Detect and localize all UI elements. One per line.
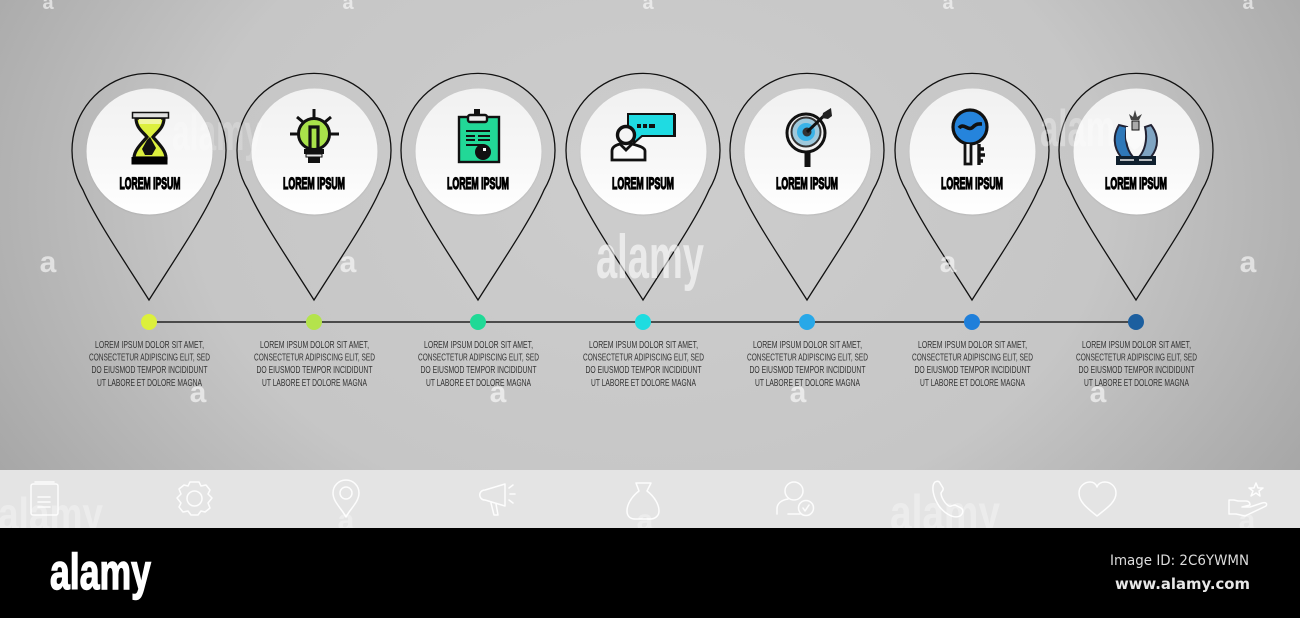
watermarks over artwork: a [190,376,207,409]
description [89,339,210,389]
step 6: key pin [895,73,1049,389]
description: UT LABORE ET DOLORE MAGNA [1084,377,1189,389]
description: CONSECTETUR ADIPISCING ELIT, SED [418,352,539,364]
description: LOREM IPSUM DOLOR SIT AMET, [753,339,862,351]
description [254,339,375,389]
footer bar [0,528,1300,618]
icon: person with speech bubble [612,114,676,160]
strip watermarks: a [338,504,355,537]
description: LOREM IPSUM DOLOR SIT AMET, [589,339,698,351]
pin outline [566,73,720,300]
pin outline [1059,73,1213,300]
white disc [86,88,212,214]
label: LOREM IPSUM [120,174,180,193]
icon: heart outline [1079,482,1116,516]
watermarks over artwork: a [940,246,957,279]
watermarks over artwork: a [40,246,57,279]
website: www.alamy.com [1115,575,1250,593]
pin outline [895,73,1049,300]
strip watermarks: a [1239,504,1256,537]
strip watermarks [0,485,1256,541]
description: LOREM IPSUM DOLOR SIT AMET, [1082,339,1191,351]
description [747,339,868,389]
watermarks over artwork: a [1090,376,1107,409]
description: LOREM IPSUM DOLOR SIT AMET, [424,339,533,351]
description: DO EIUSMOD TEMPOR INCIDIDUNT [914,364,1031,376]
step 5: target pin [730,73,884,389]
description: LOREM IPSUM DOLOR SIT AMET, [918,339,1027,351]
description: UT LABORE ET DOLORE MAGNA [97,377,202,389]
step dot [635,314,651,330]
description: CONSECTETUR ADIPISCING ELIT, SED [254,352,375,364]
step 3: clipboard pin [401,73,555,389]
description: DO EIUSMOD TEMPOR INCIDIDUNT [586,364,702,376]
white disc [416,88,542,214]
step 2: light bulb pin [237,73,391,389]
description: CONSECTETUR ADIPISCING ELIT, SED [583,352,704,364]
strip watermarks: alamy [890,485,1000,541]
timeline line [149,321,1136,323]
icon: user check outline [777,482,814,516]
description: UT LABORE ET DOLORE MAGNA [591,377,696,389]
image id: Image ID: 2C6YWMN [1110,553,1249,569]
icon: megaphone outline [480,484,515,515]
step dot [141,314,157,330]
icon: money bag outline [627,483,659,519]
step dot [470,314,486,330]
icon: hand with star outline [1229,483,1267,516]
description [418,339,539,389]
bottom icon strip [0,470,1300,528]
description: CONSECTETUR ADIPISCING ELIT, SED [747,352,868,364]
watermarks over artwork [40,0,1257,409]
background [0,0,1300,470]
description: DO EIUSMOD TEMPOR INCIDIDUNT [1078,364,1195,376]
description: DO EIUSMOD TEMPOR INCIDIDUNT [256,364,373,376]
label: LOREM IPSUM [447,174,509,193]
white disc [744,88,870,214]
watermarks over artwork: alam [1040,100,1115,158]
icon: clipboard [459,109,499,162]
watermarks over artwork: a [340,246,357,279]
description: CONSECTETUR ADIPISCING ELIT, SED [1076,352,1197,364]
white disc [910,88,1036,214]
watermarks over artwork: alamy [596,223,704,292]
watermarks over artwork: a [490,376,507,409]
description: DO EIUSMOD TEMPOR INCIDIDUNT [420,364,537,376]
white disc [580,88,706,214]
description: UT LABORE ET DOLORE MAGNA [426,377,531,389]
description: UT LABORE ET DOLORE MAGNA [262,377,367,389]
icon: phone outline [933,481,963,517]
step dot [1128,314,1144,330]
strip watermarks: a [637,504,654,537]
description: CONSECTETUR ADIPISCING ELIT, SED [912,352,1033,364]
description: CONSECTETUR ADIPISCING ELIT, SED [89,352,210,364]
description: LOREM IPSUM DOLOR SIT AMET, [95,339,204,351]
icon: target with arrow [787,108,832,167]
step dot [306,314,322,330]
description: DO EIUSMOD TEMPOR INCIDIDUNT [92,364,208,376]
description: UT LABORE ET DOLORE MAGNA [920,377,1025,389]
description: DO EIUSMOD TEMPOR INCIDIDUNT [750,364,866,376]
label: LOREM IPSUM [776,174,838,193]
watermarks over artwork: alamy [172,104,262,162]
pin outline [401,73,555,300]
icon: hourglass [132,112,168,164]
icon: clipboard outline [31,482,58,515]
step 7: laurel trophy pin [1059,73,1213,389]
label: LOREM IPSUM [1105,174,1167,193]
step dot [964,314,980,330]
pin outline [730,73,884,300]
description: LOREM IPSUM DOLOR SIT AMET, [260,339,369,351]
step dot [799,314,815,330]
step 4: speech bubble pin [566,73,720,389]
icon: gear outline [177,482,212,515]
step 1: hourglass pin [72,73,226,389]
icon: laurel with star [1115,110,1157,165]
description [912,339,1033,389]
icon: light bulb [290,109,339,163]
description [1076,339,1197,389]
icon: key [953,110,987,165]
white disc [252,88,378,214]
icon: location pin outline [333,480,359,517]
label: LOREM IPSUM [612,174,674,193]
description: UT LABORE ET DOLORE MAGNA [755,377,860,389]
watermarks over artwork: a [790,376,807,409]
pin outline [72,73,226,300]
strip watermarks: alamy [0,488,103,540]
label: LOREM IPSUM [941,174,1003,193]
description [583,339,704,389]
pin outline [237,73,391,300]
footer logo: alamy [50,544,151,600]
white disc [1074,88,1200,214]
watermarks over artwork: a [1240,246,1257,279]
label: LOREM IPSUM [283,174,345,193]
